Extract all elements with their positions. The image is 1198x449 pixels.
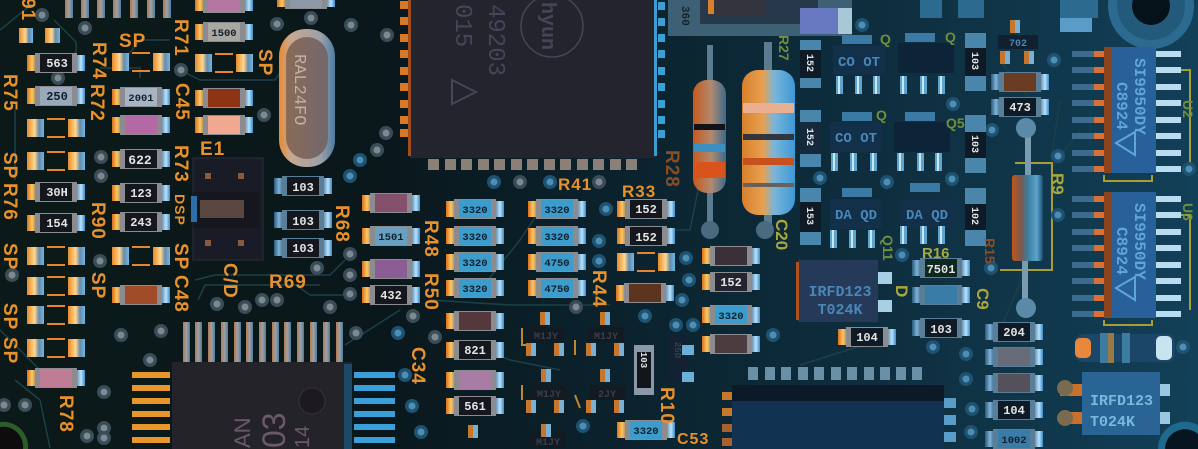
board labels: yellow-green silkscreen right: R15 — [982, 238, 998, 264]
SI9950DY IC top: C8924 — [1112, 82, 1130, 130]
IRFD123 component right: IRFD123 — [1090, 393, 1153, 410]
transistor block: DA QD — [835, 208, 877, 224]
board labels: yellow-green silkscreen right: Q5 — [946, 115, 965, 131]
small transistors M1JY: M1JY — [536, 438, 560, 449]
vertical resistor 103 — [634, 345, 654, 395]
board labels: orange silkscreen left: C45 — [171, 83, 192, 121]
bottom-centre chip pins — [748, 367, 922, 380]
SMD column 6: 4750 — [544, 258, 570, 270]
bottom-left chip: 03 — [256, 412, 292, 448]
transistor block — [830, 33, 954, 248]
SI9950DY IC top — [1104, 47, 1156, 173]
SMD column 8: 3320 — [718, 311, 744, 323]
board labels: yellow-green silkscreen right: R16 — [922, 245, 950, 262]
board labels: yellow-green silkscreen right: Q — [945, 29, 956, 45]
SMD right group — [985, 72, 1049, 449]
chip markings: 49203 — [481, 4, 508, 76]
vertical resistors — [800, 33, 986, 246]
cylindrical capacitor — [1075, 333, 1175, 363]
SMD column 8 — [702, 246, 760, 354]
board labels: yellow-green silkscreen right: U2 — [1180, 100, 1196, 118]
transistor 702 — [998, 20, 1038, 64]
crystal oscillator — [279, 29, 335, 167]
board labels: orange silkscreen centre: R44 — [588, 270, 609, 308]
board labels: orange silkscreen left: R74 — [88, 42, 109, 80]
board labels: yellow-green silkscreen right — [772, 29, 1196, 310]
SMD column 5: 3320 — [462, 258, 488, 270]
board labels: yellow-green silkscreen right: D — [892, 285, 911, 297]
top right small parts — [920, 0, 1098, 32]
small transistors M1JY: M1JY — [537, 390, 561, 401]
SMD column 4 — [362, 193, 420, 305]
SMD right group: 1002 — [1001, 435, 1027, 447]
IRFD123 component left: T024K — [817, 302, 863, 319]
IRFD123 component right — [1057, 372, 1170, 435]
chip markings — [448, 0, 583, 104]
bottom-left chip — [172, 362, 352, 449]
vertical resistors: 103 — [968, 135, 979, 153]
SMD column 2: 243 — [130, 216, 152, 230]
board labels: orange silkscreen left — [0, 0, 352, 433]
SMD column beside jumper: 103 — [292, 215, 314, 229]
SMD column 7: 152 — [635, 203, 657, 217]
board labels: yellow-green silkscreen right: R27 — [776, 35, 792, 61]
transistor block: CO OT — [838, 55, 880, 71]
SMD column 4: 1501 — [378, 232, 404, 244]
SMD middle blue group: 104 — [856, 331, 878, 345]
board labels: orange silkscreen centre: C34 — [407, 347, 428, 385]
board labels: orange silkscreen left: SP — [170, 243, 191, 270]
board labels: orange silkscreen left: R90 — [87, 202, 108, 240]
board labels: yellow-green silkscreen right: C20 — [772, 219, 791, 250]
SMD column 5: 561 — [464, 400, 486, 414]
SMD column 1: 250 — [46, 90, 68, 104]
comb pins above bottom-left chip — [183, 322, 343, 362]
small transistors M1JY: 25D — [672, 342, 682, 359]
board labels: yellow-green silkscreen right: U3 — [1180, 203, 1196, 221]
SMD column 2: 2001 — [128, 93, 154, 105]
SMD column 5 — [446, 199, 504, 416]
board labels: orange silkscreen left: R73 — [170, 145, 191, 183]
board labels: yellow-green silkscreen right: C9 — [973, 288, 992, 310]
SMD column 5: 3320 — [462, 205, 488, 217]
SMD column 6: 3320 — [544, 205, 570, 217]
SMD column 1: 30H — [46, 186, 68, 200]
chip markings: 015 — [448, 4, 475, 47]
board labels: yellow-green silkscreen right: R9 — [1048, 173, 1067, 195]
SMD column 6: 4750 — [544, 284, 570, 296]
SMD column 7: 3320 — [633, 426, 659, 438]
board labels: orange silkscreen left: DSP — [172, 194, 188, 226]
top-right mounting hole — [1108, 0, 1194, 49]
small transistors M1JY — [468, 312, 694, 449]
SMD column 7: 152 — [635, 231, 657, 245]
IC left pins — [1072, 51, 1104, 317]
board labels: orange silkscreen centre: R28 — [661, 150, 682, 188]
SMD middle blue group — [838, 258, 970, 347]
axial diode — [1012, 118, 1043, 318]
board labels: orange silkscreen left: R78 — [55, 395, 76, 433]
IRFD123 component right: T024K — [1090, 414, 1135, 431]
chip markings: hyun — [535, 2, 558, 50]
SMD column 8: 152 — [720, 276, 742, 290]
board labels: orange silkscreen centre: R41 — [558, 175, 592, 194]
bottom-left chip: 14 — [292, 426, 314, 448]
chip left pins — [400, 1, 408, 137]
SMD column beside jumper: 103 — [292, 242, 314, 256]
small transistors M1JY: M1JY — [594, 332, 618, 343]
board labels: orange silkscreen left: SP — [254, 49, 275, 76]
bottom-right mounting hole — [1158, 422, 1198, 449]
vertical resistors: 103 — [968, 52, 979, 70]
board labels: orange silkscreen left: C/D — [219, 263, 240, 299]
SMD column 2: 123 — [130, 187, 152, 201]
chip right pins — [658, 2, 665, 138]
board labels: orange silkscreen centre: R48 — [420, 220, 441, 258]
bottom-left mounting hole — [0, 422, 28, 449]
board labels: orange silkscreen centre: R50 — [420, 273, 441, 311]
board labels: orange silkscreen left: R72 — [86, 84, 107, 122]
SMD column 5: 821 — [464, 344, 486, 358]
orange pins left of chip — [132, 372, 170, 443]
SMD column 4: 432 — [380, 289, 402, 303]
metal box top right — [668, 0, 852, 36]
SMD column beside jumper: 103 — [292, 181, 314, 195]
IC right pins — [1156, 51, 1181, 317]
vertical resistors: 153 — [803, 207, 814, 225]
transistor block: DA QD — [906, 208, 948, 224]
SMD column 6 — [528, 199, 586, 298]
SI9950DY IC bottom: C8924 — [1112, 227, 1130, 275]
board labels: orange silkscreen left: R71 — [170, 19, 191, 57]
board labels: orange silkscreen left: R68 — [331, 205, 352, 243]
crystal oscillator: RAL24FO — [289, 54, 308, 125]
board labels: yellow-green silkscreen right: Q — [880, 31, 891, 47]
SMD column 5: 3320 — [462, 232, 488, 244]
board labels: orange silkscreen left: SP — [119, 31, 146, 52]
SMD column 6: 3320 — [544, 232, 570, 244]
small transistors M1JY: M1JY — [534, 332, 558, 343]
metal box top right: 360 — [678, 6, 690, 26]
SMD right group: 104 — [1003, 404, 1025, 418]
SMD right group: 204 — [1003, 326, 1025, 340]
large square chip — [408, 0, 657, 158]
SI9950DY IC top: SI9950DY — [1130, 58, 1148, 135]
IRFD123 component left — [796, 260, 892, 322]
SMD middle blue group: 7501 — [927, 263, 955, 277]
board labels: orange silkscreen centre: R33 — [622, 182, 656, 201]
jumper switch E1 — [191, 158, 263, 260]
board labels: orange silkscreen left: R69 — [269, 272, 307, 293]
top pin row — [65, 0, 171, 18]
board labels: orange silkscreen left: SP — [87, 272, 108, 299]
SMD column 2: 622 — [128, 153, 152, 168]
board labels: orange silkscreen centre — [407, 150, 709, 448]
SMD column 3 — [195, 0, 335, 135]
SMD column beside jumper — [274, 176, 332, 258]
small axial resistor — [693, 45, 726, 239]
SMD column 3: 1500 — [211, 28, 237, 40]
bottom-centre chip — [722, 385, 956, 449]
board labels: orange silkscreen centre: R10 — [656, 387, 677, 425]
small transistors M1JY: 2JY — [598, 390, 616, 401]
board labels: yellow-green silkscreen right: Q11 — [880, 235, 896, 261]
vertical resistors: 102 — [968, 207, 979, 225]
SMD right group: 473 — [1009, 101, 1031, 115]
IRFD123 component left: IRFD123 — [808, 284, 872, 301]
board labels: orange silkscreen left: E1 — [200, 139, 225, 160]
vertical resistor 103: 103 — [638, 352, 648, 368]
board labels: orange silkscreen centre: C53 — [677, 431, 709, 448]
board labels: yellow-green silkscreen right: Q — [876, 107, 887, 123]
transistor block: CO OT — [835, 131, 877, 147]
large axial resistor — [742, 42, 795, 239]
SMD column 1: 154 — [46, 217, 68, 231]
SMD column 7 — [616, 199, 675, 440]
SMD middle blue group: 103 — [930, 323, 952, 337]
SMD column 1: 563 — [46, 57, 68, 71]
SMD column 2 — [112, 52, 170, 305]
chip bottom pins — [428, 159, 637, 170]
bottom-left chip: AN — [230, 417, 255, 448]
vertical resistors: 152 — [803, 128, 814, 146]
SI9950DY IC bottom: SI9950DY — [1130, 203, 1148, 280]
SI9950DY IC bottom — [1104, 192, 1156, 318]
transistor 702: 702 — [1009, 39, 1027, 50]
vertical resistors: 152 — [803, 54, 814, 72]
SMD column 1 — [27, 53, 85, 388]
SMD column 5: 3320 — [462, 284, 488, 296]
blue pins right of chip — [354, 372, 395, 443]
small pads — [19, 28, 60, 43]
board labels: orange silkscreen left: C48 — [170, 275, 191, 313]
